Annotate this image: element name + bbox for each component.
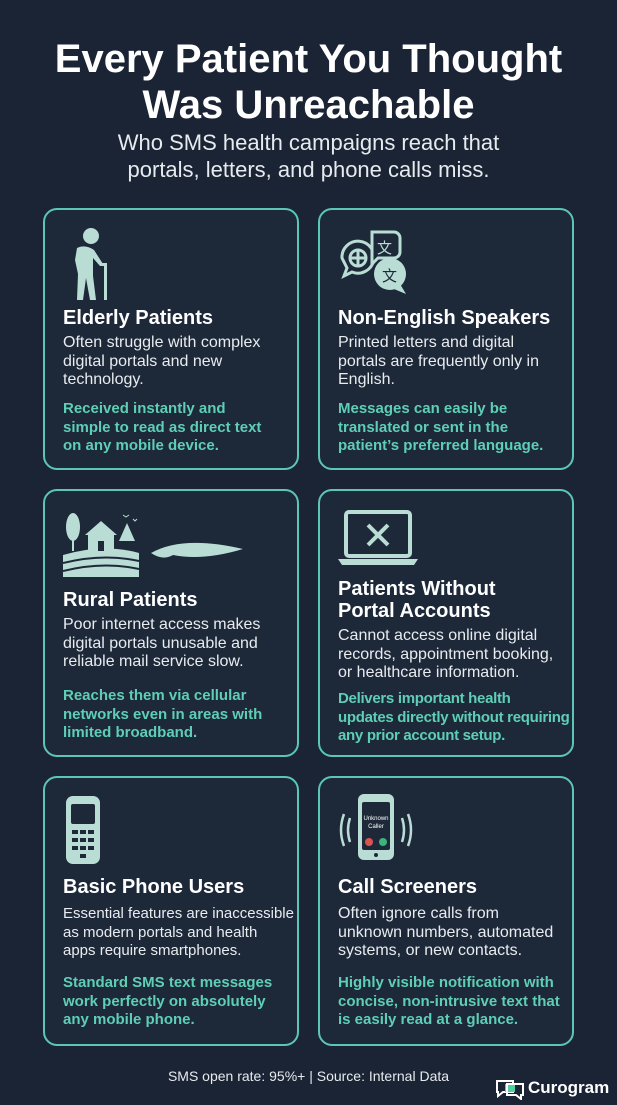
body bbox=[63, 616, 260, 670]
body: Poor internet access makes bbox=[63, 616, 260, 633]
body bbox=[338, 627, 553, 681]
body: unknown numbers, automated bbox=[338, 924, 553, 940]
heading: Basic Phone Users bbox=[63, 876, 244, 898]
highlight: Delivers important health bbox=[338, 690, 511, 707]
highlight bbox=[63, 974, 272, 1028]
body: records, appointment booking, bbox=[338, 646, 553, 662]
body: as modern portals and health bbox=[63, 924, 257, 940]
body: Cannot access online digital bbox=[338, 627, 537, 644]
body: systems, or new contacts. bbox=[338, 942, 522, 959]
icon: translation bubbles bbox=[340, 230, 406, 294]
icon: elderly person with cane bbox=[75, 228, 107, 300]
logo: Curogram bbox=[496, 1078, 609, 1100]
heading: Rural Patients bbox=[63, 589, 197, 611]
heading bbox=[338, 578, 496, 622]
icon: phone with unknown caller bbox=[340, 794, 412, 860]
heading: Patients Without bbox=[338, 578, 496, 600]
title: Was Unreachable bbox=[142, 83, 474, 127]
body bbox=[338, 334, 539, 388]
highlight: networks even in areas with bbox=[63, 706, 262, 722]
body: Often struggle with complex bbox=[63, 334, 260, 351]
highlight bbox=[338, 974, 560, 1028]
subtitle: portals, letters, and phone calls miss. bbox=[128, 157, 489, 182]
highlight: updates directly without requiring bbox=[338, 708, 570, 726]
icon: basic phone bbox=[66, 796, 100, 864]
body: Often ignore calls from bbox=[338, 905, 499, 922]
body: Printed letters and digital bbox=[338, 334, 514, 351]
heading: Elderly Patients bbox=[63, 307, 213, 329]
highlight bbox=[63, 687, 262, 741]
highlight: Received instantly and bbox=[63, 400, 226, 417]
body: technology. bbox=[63, 371, 144, 388]
highlight: Messages can easily be bbox=[338, 400, 507, 417]
highlight: limited broadband. bbox=[63, 724, 197, 741]
panel: call screeners bbox=[318, 776, 574, 1046]
body: Essential features are inaccessible bbox=[63, 905, 294, 922]
highlight bbox=[338, 690, 570, 744]
body: portals are frequently only in bbox=[338, 352, 539, 370]
highlight: patient’s preferred language. bbox=[338, 437, 543, 454]
highlight: concise, non-intrusive text that bbox=[338, 992, 560, 1010]
highlight: Highly visible notification with bbox=[338, 974, 554, 991]
panel: elderly patients bbox=[43, 208, 299, 470]
highlight: Reaches them via cellular bbox=[63, 687, 246, 704]
icon: rural landscape bbox=[63, 513, 243, 577]
panel: patients without portal accounts bbox=[318, 489, 574, 757]
icon: translation bubbles: 文 bbox=[382, 265, 397, 286]
highlight: Standard SMS text messages bbox=[63, 974, 272, 991]
body: digital portals unusable and bbox=[63, 634, 258, 652]
heading: Call Screeners bbox=[338, 876, 477, 898]
highlight: on any mobile device. bbox=[63, 437, 219, 454]
panel: non-english speakers bbox=[318, 208, 574, 470]
icon: phone with unknown caller: Caller bbox=[368, 824, 384, 830]
body: or healthcare information. bbox=[338, 664, 519, 681]
body bbox=[63, 905, 294, 959]
highlight bbox=[63, 400, 262, 454]
heading: Portal Accounts bbox=[338, 600, 491, 622]
highlight bbox=[338, 400, 543, 454]
panel: basic phone users bbox=[43, 776, 299, 1046]
body: English. bbox=[338, 371, 395, 388]
body bbox=[63, 334, 260, 388]
highlight: any mobile phone. bbox=[63, 1011, 195, 1028]
highlight: simple to read as direct text bbox=[63, 418, 261, 436]
logo: Curogram: Curogram bbox=[528, 1078, 609, 1097]
icon: phone with unknown caller: Unknown bbox=[363, 816, 389, 822]
highlight: any prior account setup. bbox=[338, 727, 505, 744]
highlight: is easily read at a glance. bbox=[338, 1011, 518, 1028]
body: apps require smartphones. bbox=[63, 942, 241, 959]
body bbox=[338, 905, 553, 959]
highlight: work perfectly on absolutely bbox=[63, 992, 266, 1010]
body: reliable mail service slow. bbox=[63, 653, 244, 670]
title: Every Patient You Thought bbox=[55, 37, 562, 81]
body: digital portals and new bbox=[63, 352, 222, 370]
subtitle bbox=[118, 130, 500, 182]
footer source: SMS open rate: 95%+ | Source: Internal Data bbox=[168, 1068, 449, 1084]
icon: translation bubbles: 文 bbox=[377, 237, 392, 258]
highlight: translated or sent in the bbox=[338, 418, 508, 436]
heading: Non-English Speakers bbox=[338, 307, 550, 329]
icon: laptop with X bbox=[338, 510, 418, 565]
panel: rural patients bbox=[43, 489, 299, 757]
subtitle: Who SMS health campaigns reach that bbox=[118, 130, 499, 155]
title bbox=[55, 37, 562, 127]
